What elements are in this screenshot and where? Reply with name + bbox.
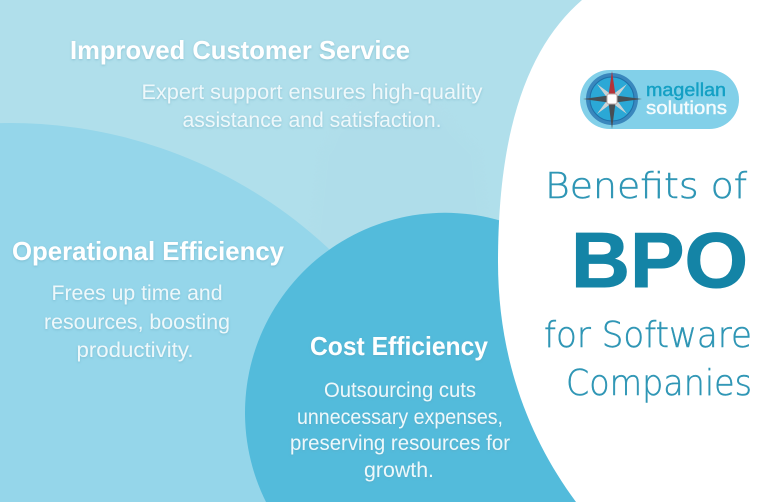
text: improved customer service description: assistance and satisfaction. xyxy=(182,108,442,132)
panel: cost efficiency circle xyxy=(245,213,645,502)
heading: cost efficiency: Cost Efficiency xyxy=(310,331,489,361)
heading: improved customer service: Improved Customer Service xyxy=(70,35,410,65)
faint background photo xyxy=(300,85,500,330)
text: cost efficiency description xyxy=(290,378,510,482)
text: operational efficiency description xyxy=(44,281,230,362)
text: cost efficiency description: growth. xyxy=(364,458,434,482)
text: operational efficiency description: Frees up time and xyxy=(52,281,222,305)
text: improved customer service description: Expert support ensures high-quality xyxy=(142,80,483,104)
logo wordmark: solutions xyxy=(646,98,727,118)
title: BPO: BPO xyxy=(571,216,748,304)
text: operational efficiency description: resources, boosting xyxy=(44,310,230,334)
text: improved customer service description xyxy=(142,80,483,132)
logo: magellan solutions xyxy=(580,70,739,129)
heading: operational efficiency: Operational Efficiency xyxy=(12,236,285,266)
text: cost efficiency description: Outsourcing cuts xyxy=(324,378,476,402)
text: cost efficiency description: unnecessary expenses, xyxy=(297,405,503,429)
panel: white title area xyxy=(498,0,768,502)
text: operational efficiency description: productivity. xyxy=(76,338,194,362)
title: benefits of: Benefits of xyxy=(545,166,747,207)
logo wordmark xyxy=(646,80,727,118)
logo wordmark: magellan xyxy=(646,80,726,100)
title: companies: Companies xyxy=(566,363,752,404)
title: for software: for Software xyxy=(544,315,752,356)
text: cost efficiency description: preserving resources for xyxy=(290,431,510,455)
panel: operational efficiency circle xyxy=(0,123,469,502)
icon: compass xyxy=(583,71,642,129)
